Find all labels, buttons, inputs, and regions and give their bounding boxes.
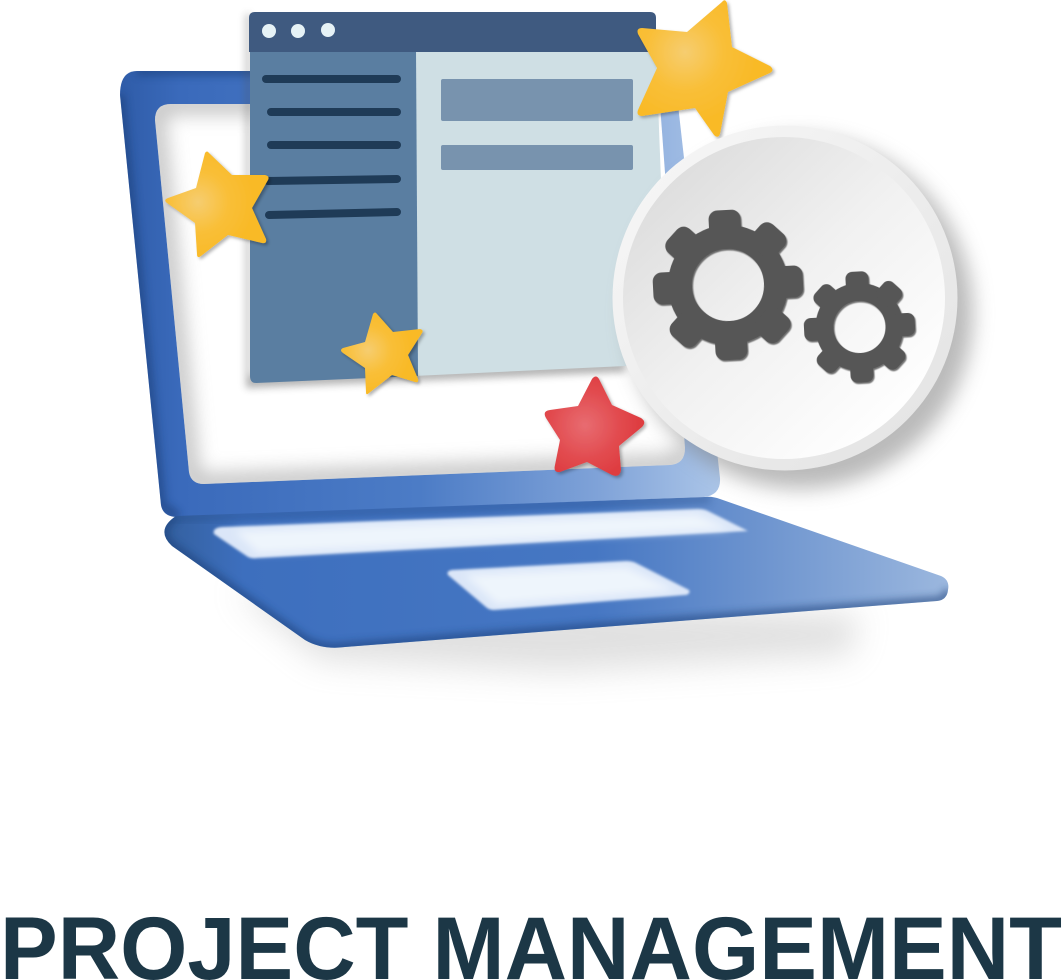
laptop ground shadow <box>235 590 860 672</box>
window title bar <box>249 12 656 52</box>
trackpad <box>448 561 690 610</box>
badge rim <box>612 126 958 470</box>
content blocks <box>441 79 633 170</box>
circle badge <box>612 126 973 489</box>
app window <box>246 12 668 388</box>
window sidebar <box>250 50 418 383</box>
badge shadow <box>627 137 973 489</box>
large gear <box>649 206 807 364</box>
sidebar lines <box>266 79 397 215</box>
laptop base <box>164 497 948 648</box>
badge face <box>623 137 945 459</box>
window dots <box>262 23 335 38</box>
laptop screen <box>155 104 685 484</box>
window content pane <box>410 50 668 376</box>
laptop lid <box>120 71 720 517</box>
window shadow <box>246 14 625 388</box>
small gear <box>801 269 918 385</box>
keyboard <box>214 509 748 558</box>
red star <box>545 376 644 476</box>
gold star top right <box>638 0 772 137</box>
gold star center <box>341 312 423 394</box>
laptop <box>120 71 948 648</box>
gold star left <box>165 152 269 257</box>
